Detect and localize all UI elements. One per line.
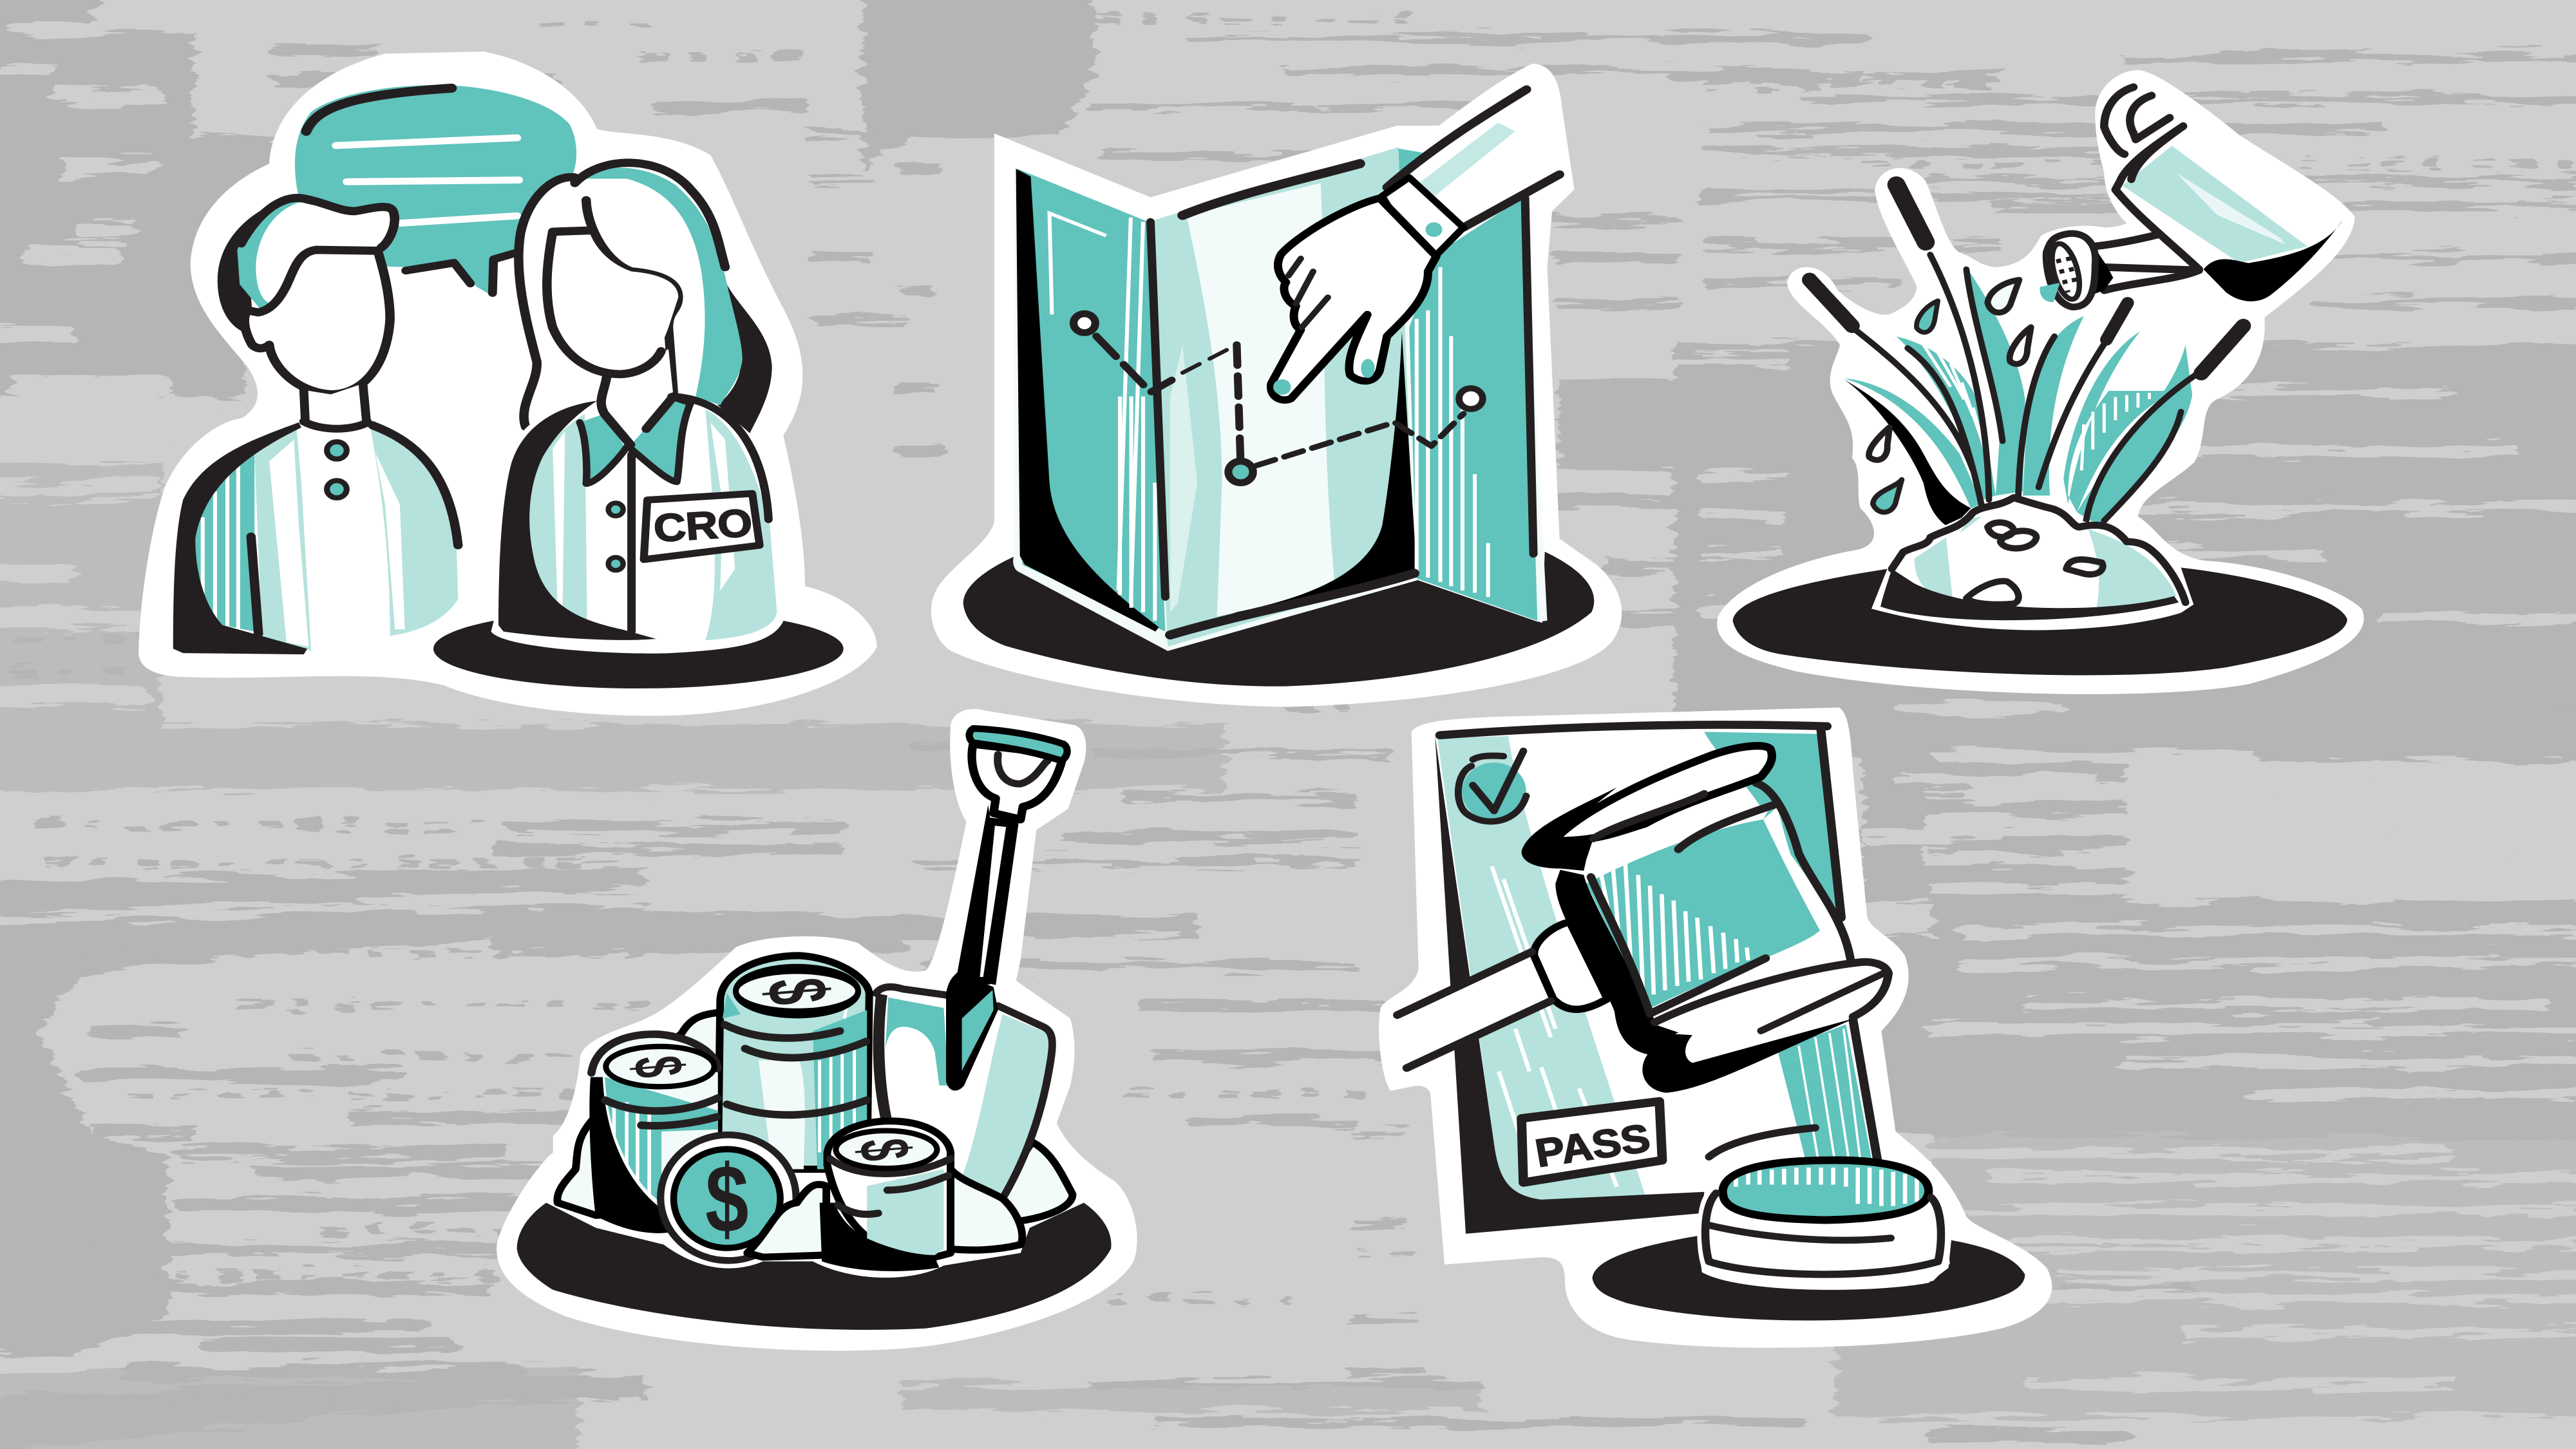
- sticker white backing: [1379, 708, 2052, 1348]
- folded map: [1013, 147, 1548, 651]
- sticker: watering can and plant: [1717, 70, 2364, 694]
- sticker white backing: [497, 709, 1137, 1350]
- dollar glyph on tall stack: $: [749, 975, 846, 1008]
- dirt mound front: [747, 1170, 1022, 1257]
- ground ellipse: [433, 609, 844, 688]
- shovel: [873, 728, 1067, 1198]
- dashed route: [1074, 314, 1482, 483]
- woman figure: [491, 163, 787, 654]
- plant leaves and cattails: [1810, 185, 2243, 529]
- sticker white backing: [1717, 70, 2364, 694]
- PASS label: PASS: [1532, 1115, 1653, 1175]
- watering can rose: [2040, 234, 2096, 307]
- dollar coin: [661, 1135, 796, 1260]
- check badge: [1458, 751, 1526, 822]
- sticker white backing: [931, 64, 1622, 707]
- sound block: [1697, 1160, 1950, 1289]
- sticker: gavel and pass document: [1379, 708, 2052, 1348]
- dollar glyph on small stack: $: [844, 1136, 925, 1164]
- ground ellipse: [963, 552, 1594, 687]
- ground ellipse: [1593, 1236, 2025, 1320]
- pass document: [1435, 724, 1879, 1234]
- name tag CRO: [644, 493, 760, 560]
- sticker: map with pointing hand: [931, 64, 1622, 707]
- dollar glyph on left stack: $: [619, 1053, 697, 1080]
- left coin stack: [589, 1034, 718, 1233]
- dollar coin: $: [705, 1145, 748, 1253]
- speech bubble: [295, 85, 576, 295]
- ground ellipse: [1733, 567, 2347, 675]
- soil mound: [1871, 496, 2193, 630]
- small coin stack: [820, 1121, 951, 1271]
- pointing hand and sleeve: [1271, 88, 1562, 400]
- PASS label: [1522, 1101, 1662, 1182]
- sticker: CRO conversation: [138, 52, 877, 716]
- sticker: coins and shovel: [497, 709, 1137, 1350]
- gavel: [1397, 746, 1888, 1093]
- water droplets: [1869, 280, 2031, 512]
- man figure: [173, 198, 458, 654]
- tall coin stack: [718, 956, 869, 1170]
- dirt mound back: [557, 1012, 1072, 1222]
- watering can: [2040, 87, 2343, 307]
- sticker white backing: [138, 52, 877, 716]
- ground ellipse: [517, 1203, 1112, 1330]
- name tag CRO: CRO: [652, 500, 754, 550]
